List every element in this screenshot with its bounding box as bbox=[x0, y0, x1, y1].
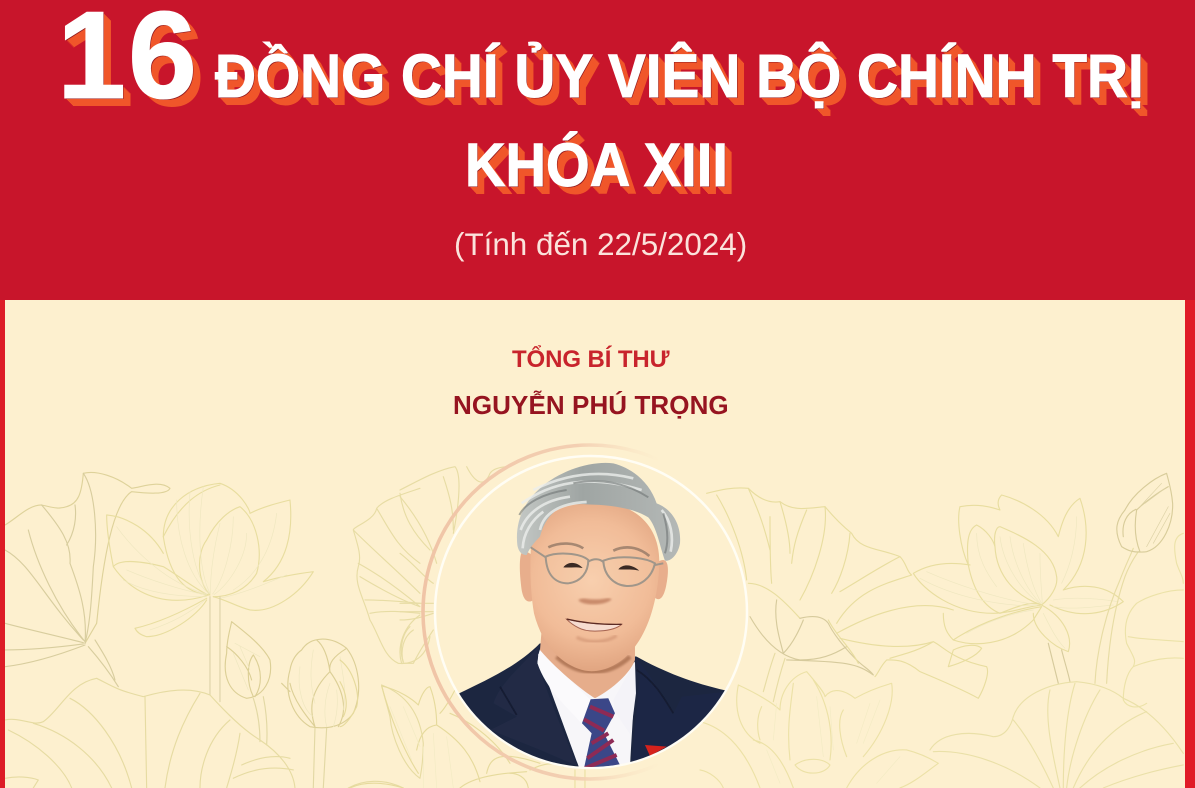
cream panel bbox=[5, 345, 1184, 788]
face bbox=[530, 502, 659, 671]
suit jacket bbox=[459, 643, 725, 766]
tie bbox=[582, 698, 620, 768]
hair bbox=[517, 463, 680, 561]
right red border bbox=[1185, 300, 1195, 788]
ears bbox=[520, 552, 532, 602]
neck bbox=[540, 630, 635, 698]
right lotus group bbox=[700, 473, 1183, 788]
title line 1: ĐỒNG CHÍ ỦY VIÊN BỘ CHÍNH TRỊ bbox=[215, 42, 1144, 110]
pink decorative ring bbox=[423, 445, 757, 779]
mouth bbox=[567, 619, 622, 631]
date subtitle: (Tính đến 22/5/2024) bbox=[454, 227, 747, 262]
role label: TỔNG BÍ THƯ bbox=[512, 346, 669, 373]
nose bbox=[578, 598, 612, 604]
centre-left lotus leaf behind portrait bbox=[400, 467, 510, 663]
lower centre lotus bbox=[340, 660, 585, 788]
shirt bbox=[537, 653, 635, 768]
header band bbox=[0, 0, 1195, 300]
lapels bbox=[504, 644, 540, 712]
lotus background illustration bbox=[5, 443, 1184, 788]
eyes bbox=[563, 563, 639, 571]
eyebrows bbox=[548, 544, 649, 556]
left lotus group bbox=[5, 472, 430, 788]
person name: NGUYỄN PHÚ TRỌNG bbox=[453, 390, 729, 420]
left red border bbox=[0, 300, 5, 788]
title line 2: KHÓA XIII bbox=[465, 131, 728, 199]
portrait in circle bbox=[434, 454, 748, 770]
party flag pin bbox=[645, 745, 667, 756]
glasses bbox=[531, 547, 663, 586]
